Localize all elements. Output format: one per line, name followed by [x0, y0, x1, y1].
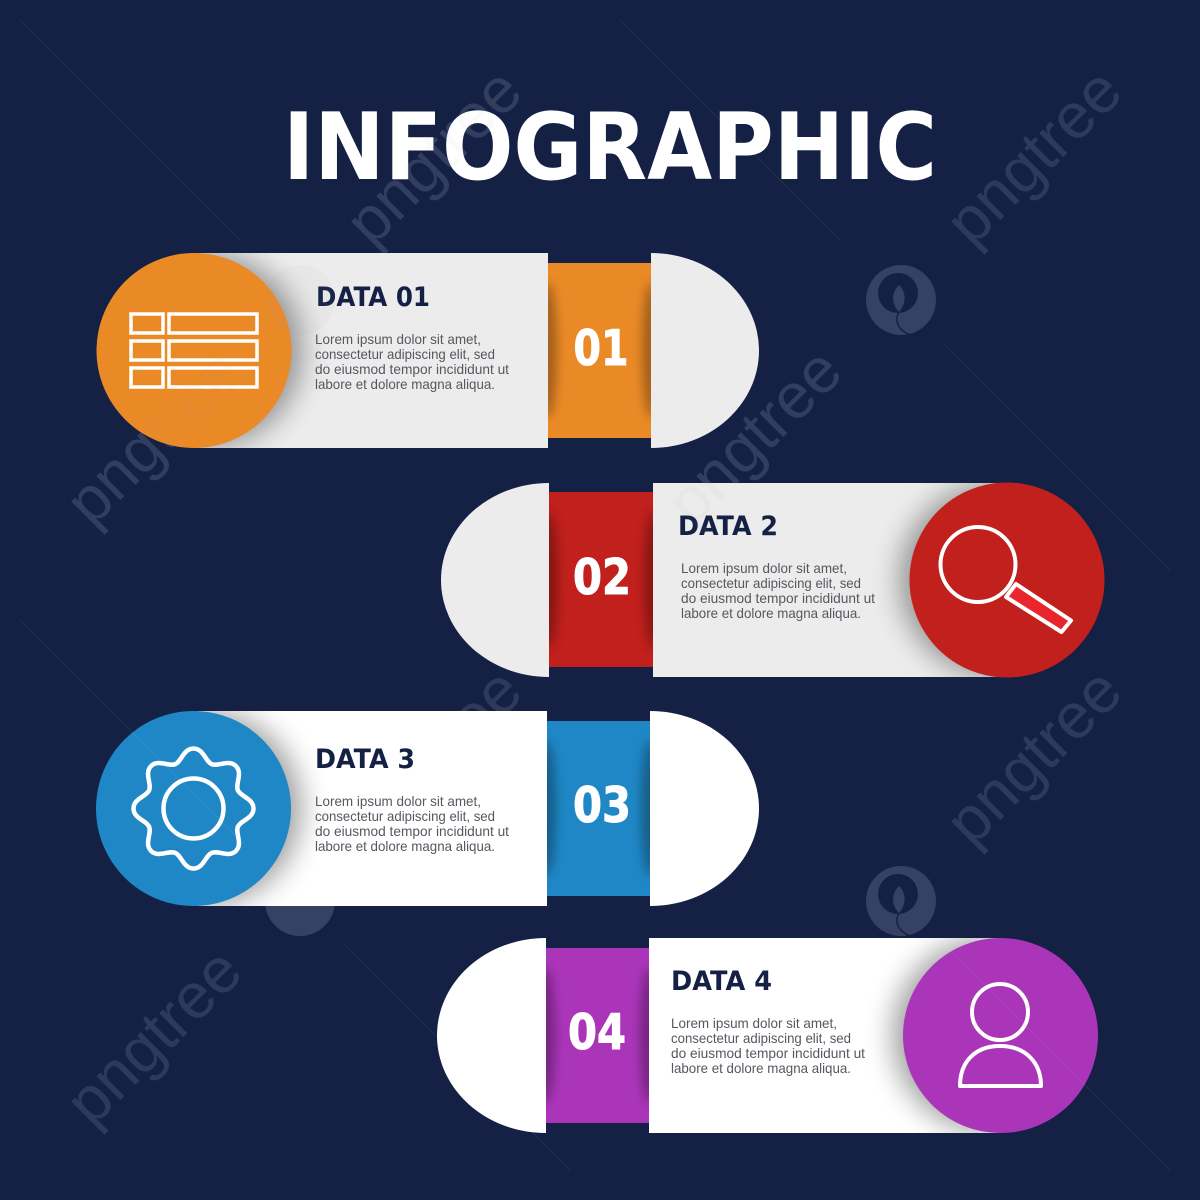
- icon: gear: [96, 711, 291, 906]
- text block: data 01: labore et dolore magna aliqua.: [315, 377, 495, 392]
- heading: data 3: DATA 3: [315, 744, 415, 775]
- number: 02: 02: [573, 549, 631, 606]
- watermark: pngtree: [651, 334, 855, 538]
- watermark: pngtree: [931, 54, 1135, 258]
- panel: data 01: [96, 253, 759, 448]
- text block: data 4: labore et dolore magna aliqua.: [671, 1061, 851, 1076]
- title: INFOGRAPHIC: [283, 93, 937, 201]
- text block: data 4: Lorem ipsum dolor sit amet,: [671, 1016, 837, 1031]
- text block: data 4: [671, 1016, 865, 1076]
- number: 03: 03: [573, 777, 631, 834]
- number: 01: 01: [574, 320, 628, 377]
- text block: data 3: consectetur adipiscing elit, sed: [315, 809, 495, 824]
- text block: data 3: labore et dolore magna aliqua.: [315, 839, 495, 854]
- watermark logos: [265, 265, 936, 936]
- watermark: pngtree: [51, 334, 255, 538]
- text block: data 01: Lorem ipsum dolor sit amet,: [315, 332, 481, 347]
- number: 04: 04: [568, 1004, 626, 1061]
- text block: data 2: consectetur adipiscing elit, sed: [681, 576, 861, 591]
- text block: data 2: Lorem ipsum dolor sit amet,: [681, 561, 847, 576]
- text block: data 01: do eiusmod tempor incididunt ut: [315, 362, 509, 377]
- icon: magnifier: [910, 482, 1104, 678]
- text block: data 2: do eiusmod tempor incididunt ut: [681, 591, 875, 606]
- panel: data 4: [437, 938, 1098, 1133]
- text block: data 3: [315, 794, 509, 854]
- text block: data 4: consectetur adipiscing elit, sed: [671, 1031, 851, 1046]
- watermark: pngtree: [331, 54, 535, 258]
- heading: data 2: DATA 2: [678, 511, 778, 542]
- text block: data 2: [681, 561, 875, 621]
- text block: data 4: do eiusmod tempor incididunt ut: [671, 1046, 865, 1061]
- icon: person: [903, 938, 1098, 1133]
- text block: data 3: Lorem ipsum dolor sit amet,: [315, 794, 481, 809]
- watermark: pngtree: [51, 934, 255, 1138]
- heading: data 01: DATA 01: [316, 282, 430, 313]
- text block: data 01: [315, 332, 509, 392]
- panel: data 3: [96, 711, 759, 906]
- icon: table: [96, 253, 292, 448]
- panel: data 2: [441, 482, 1104, 678]
- watermark: pngtree: [331, 654, 535, 858]
- heading: data 4: DATA 4: [671, 966, 772, 997]
- text block: data 3: do eiusmod tempor incididunt ut: [315, 824, 509, 839]
- text block: data 01: consectetur adipiscing elit, sed: [315, 347, 495, 362]
- watermark: pngtree: [931, 654, 1135, 858]
- text block: data 2: labore et dolore magna aliqua.: [681, 606, 861, 621]
- watermark overlay: pngtree: [651, 334, 855, 538]
- watermark overlay: pngtree: [331, 54, 535, 258]
- watermark overlay: pngtree: [51, 334, 255, 538]
